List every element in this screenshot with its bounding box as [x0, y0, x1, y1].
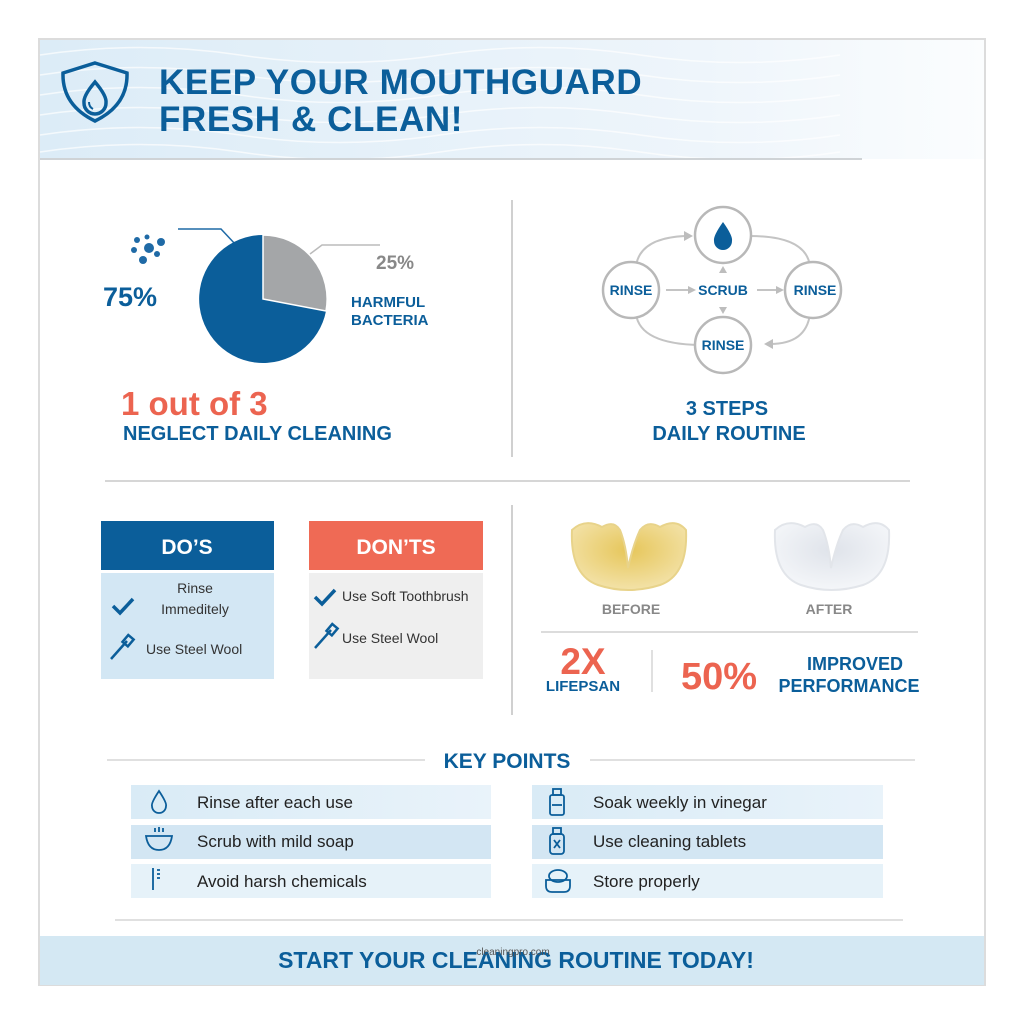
key points list: Store properly — [593, 872, 700, 891]
panel: don'ts: DON’TS — [356, 536, 436, 559]
key points list: Scrub with mild soap — [197, 832, 354, 851]
panel: before and after: PERFORMANCE — [778, 676, 920, 696]
key points list — [131, 785, 883, 898]
key points list: Use cleaning tablets — [593, 832, 746, 851]
footer banner: cleaningpro.com — [476, 947, 550, 958]
key points list: Avoid harsh chemicals — [197, 872, 367, 891]
panel: bacteria pie chart: 1 out of 3 — [121, 385, 268, 422]
panel: bacteria pie chart: BACTERIA — [351, 312, 429, 329]
icon: bacteria dots — [131, 234, 165, 264]
footer banner: START YOUR CLEANING ROUTINE TODAY! — [278, 947, 754, 973]
panel: 3 step routine cycle: 3 STEPS — [686, 398, 768, 420]
panel: before and after: LIFEPSAN — [546, 678, 620, 695]
panel: don'ts: Use Soft Toothbrush — [342, 588, 469, 604]
panel: don'ts: Use Steel Wool — [342, 630, 438, 646]
panel: do's: DO’S — [161, 536, 213, 559]
panel: do's — [101, 521, 274, 679]
panel: 3 step routine cycle — [603, 207, 841, 445]
panel: before and after: AFTER — [806, 601, 852, 617]
panel: bacteria pie chart: HARMFUL — [351, 294, 425, 311]
key points list: Rinse after each use — [197, 793, 353, 812]
icon: dirty mouthguard — [572, 523, 686, 590]
key points list: Soak weekly in vinegar — [593, 793, 767, 812]
panel: bacteria pie chart — [103, 229, 429, 445]
panel: bacteria pie chart: NEGLECT DAILY CLEANING — [123, 423, 392, 445]
panel: before and after: 2X — [560, 641, 606, 682]
panel: do's: Rinse — [177, 580, 213, 596]
panel: don'ts — [309, 521, 483, 679]
panel: do's: Immeditely — [161, 601, 229, 617]
panel: 3 step routine cycle: SCRUB — [698, 282, 748, 298]
title — [159, 63, 642, 139]
panel: before and after: IMPROVED — [807, 654, 903, 674]
panel: before and after — [541, 523, 920, 698]
title: FRESH & CLEAN! — [159, 100, 463, 139]
panel: 3 step routine cycle: RINSE — [610, 282, 652, 298]
panel: bacteria pie chart: 75% — [103, 282, 157, 312]
footer banner — [40, 936, 984, 985]
panel: before and after: 50% — [681, 656, 757, 698]
icon: clean mouthguard — [775, 523, 889, 590]
panel: do's: Use Steel Wool — [146, 641, 242, 657]
icon: drop — [714, 222, 732, 250]
header band — [40, 40, 984, 160]
panel: 3 step routine cycle: RINSE — [794, 282, 836, 298]
panel: 3 step routine cycle: RINSE — [702, 337, 744, 353]
title: KEEP YOUR MOUTHGUARD — [159, 63, 642, 102]
panel: before and after: BEFORE — [602, 601, 660, 617]
icon: shield with water drop — [63, 63, 127, 121]
panel: bacteria pie chart: 25% — [376, 253, 414, 274]
key points heading: KEY POINTS — [444, 750, 570, 773]
panel: 3 step routine cycle: DAILY ROUTINE — [652, 423, 806, 445]
pie chart — [199, 235, 327, 363]
